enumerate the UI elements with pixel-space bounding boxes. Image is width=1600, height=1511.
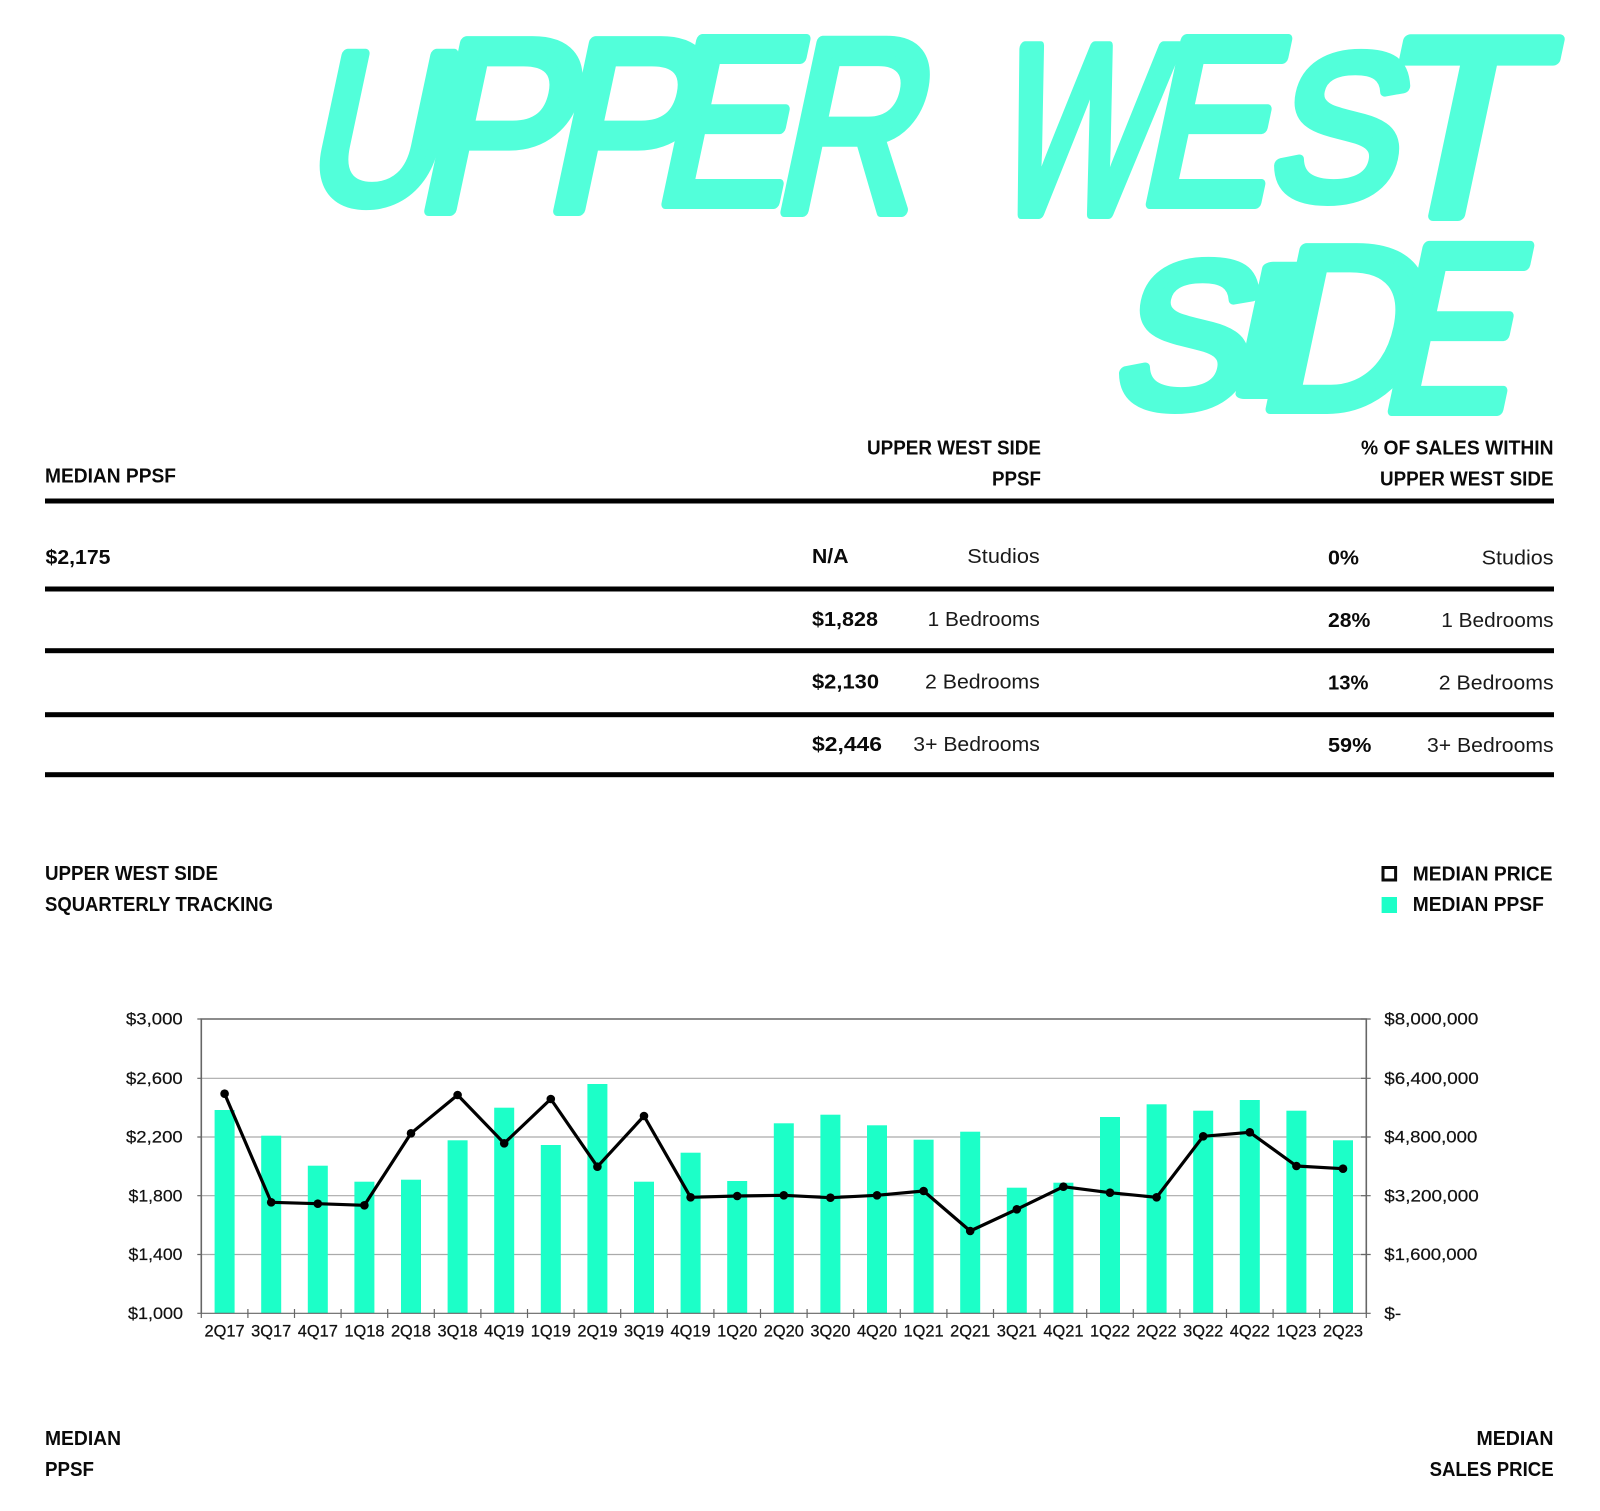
footer label: median ppsf: [45, 1428, 121, 1481]
table row: 3+ bedrooms: 3+ Bedrooms: [1427, 735, 1554, 757]
x axis labels: 4Q17: [298, 1323, 338, 1341]
chart axes: [197, 1019, 1371, 1318]
footer label: median ppsf: PPSF: [45, 1459, 94, 1481]
x axis labels: 4Q19: [671, 1323, 711, 1341]
footer label: median sales price: [1430, 1428, 1554, 1481]
x axis labels: 2Q22: [1137, 1323, 1177, 1341]
chart heading: SQUARTERLY TRACKING: [45, 894, 273, 916]
x axis labels: 3Q22: [1183, 1323, 1223, 1341]
x axis labels: 3Q20: [810, 1323, 850, 1341]
x axis labels: [205, 1323, 1363, 1341]
right axis labels: [1384, 1010, 1479, 1323]
table header: upper west side ppsf: PPSF: [992, 468, 1041, 490]
combo chart: quarterly tracking: [126, 1010, 1479, 1341]
table row: 1 bedrooms: $1,828: [812, 609, 878, 631]
x axis labels: 4Q21: [1043, 1323, 1083, 1341]
x axis labels: 2Q21: [950, 1323, 990, 1341]
title line: Side: S: [1099, 220, 1282, 450]
x axis labels: 1Q20: [717, 1323, 757, 1341]
x axis labels: 2Q18: [391, 1323, 431, 1341]
table row: 3+ bedrooms: 59%: [1328, 735, 1372, 757]
table row: studios: 0%: [1328, 547, 1359, 569]
title line: Side: D: [1243, 199, 1458, 457]
x axis labels: 3Q17: [251, 1323, 291, 1341]
left axis labels: $1,000: [128, 1304, 183, 1323]
right axis labels: $3,200,000: [1384, 1186, 1479, 1206]
left axis labels: $2,600: [126, 1069, 183, 1088]
title: Upper West Side: [246, 0, 1597, 460]
table row: 3+ bedrooms: $2,446: [812, 734, 882, 756]
bars: median ppsf: [215, 1084, 1353, 1313]
table header: upper west side ppsf: [867, 437, 1041, 490]
table row: 3+ bedrooms: [812, 734, 1554, 757]
x axis labels: 1Q23: [1276, 1323, 1316, 1341]
legend: median ppsf: MEDIAN PPSF: [1413, 894, 1544, 916]
title line: Upper West: S: [1255, 12, 1432, 242]
x axis labels: 2Q23: [1323, 1323, 1363, 1341]
table row: 1 bedrooms: 1 Bedrooms: [1441, 610, 1554, 632]
x axis labels: 2Q20: [764, 1323, 804, 1341]
left axis labels: $1,400: [128, 1245, 182, 1264]
table row: 2 bedrooms: 2 Bedrooms: [925, 672, 1040, 694]
overall median ppsf value: $2,175: [46, 547, 110, 569]
table row: 2 bedrooms: 13%: [1328, 673, 1369, 695]
right axis labels: $6,400,000: [1384, 1069, 1479, 1088]
chart heading: UPPER WEST SIDE: [45, 863, 218, 885]
right axis labels: $-: [1384, 1304, 1401, 1323]
left axis labels: $2,200: [126, 1128, 183, 1146]
table header: percent of sales within upper west side: [1361, 437, 1554, 490]
table header: median ppsf: MEDIAN PPSF: [45, 466, 176, 488]
legend: median price: MEDIAN PRICE: [1413, 863, 1553, 885]
left axis labels: [126, 1010, 183, 1323]
x axis labels: 4Q19: [484, 1323, 524, 1341]
title line: Side: I: [1210, 229, 1335, 433]
x axis labels: 4Q20: [857, 1323, 897, 1341]
table row: 2 bedrooms: $2,130: [812, 672, 879, 694]
left axis labels: $3,000: [126, 1010, 183, 1028]
x axis labels: 2Q17: [205, 1323, 245, 1341]
table row: 3+ bedrooms: 3+ Bedrooms: [913, 734, 1040, 756]
chart heading: [45, 863, 273, 916]
table header: percent of sales within upper west side: UPPER WEST SIDE: [1380, 468, 1554, 490]
x axis labels: 1Q22: [1090, 1323, 1130, 1341]
x axis labels: 3Q19: [624, 1323, 664, 1341]
x axis labels: 2Q19: [577, 1323, 617, 1341]
title line: Upper West: U: [291, 8, 477, 247]
right axis labels: $1,600,000: [1384, 1245, 1477, 1264]
x axis labels: 3Q18: [438, 1323, 478, 1341]
right axis labels: $4,800,000: [1384, 1128, 1477, 1146]
table row: studios: [812, 546, 1554, 569]
table row: 2 bedrooms: [812, 672, 1554, 695]
table row: 1 bedrooms: 28%: [1328, 610, 1371, 632]
legend: [1382, 863, 1553, 916]
table header: upper west side ppsf: UPPER WEST SIDE: [867, 437, 1041, 459]
title line: Upper West: W: [977, 0, 1190, 264]
table header: percent of sales within upper west side: % OF SALES WITHIN: [1361, 437, 1554, 459]
table row: studios: N/A: [812, 546, 848, 568]
footer label: median sales price: SALES PRICE: [1430, 1459, 1554, 1481]
table row: 1 bedrooms: [812, 609, 1554, 632]
x axis labels: 1Q21: [904, 1323, 944, 1341]
x axis labels: 1Q18: [344, 1323, 384, 1341]
x axis labels: 3Q21: [997, 1323, 1037, 1341]
table row: 2 bedrooms: 2 Bedrooms: [1439, 673, 1554, 695]
x axis labels: 1Q19: [531, 1323, 571, 1341]
left axis labels: $1,800: [128, 1186, 182, 1206]
table row: studios: Studios: [967, 546, 1040, 568]
title line: Side: E: [1366, 195, 1552, 460]
line: median price: [220, 1089, 1347, 1235]
table row: studios: Studios: [1482, 547, 1554, 569]
x axis labels: 4Q22: [1230, 1323, 1270, 1341]
footer label: median ppsf: MEDIAN: [45, 1428, 121, 1450]
footer label: median sales price: MEDIAN: [1476, 1428, 1554, 1450]
right axis labels: $8,000,000: [1384, 1010, 1478, 1028]
table row: 1 bedrooms: 1 Bedrooms: [928, 609, 1040, 631]
